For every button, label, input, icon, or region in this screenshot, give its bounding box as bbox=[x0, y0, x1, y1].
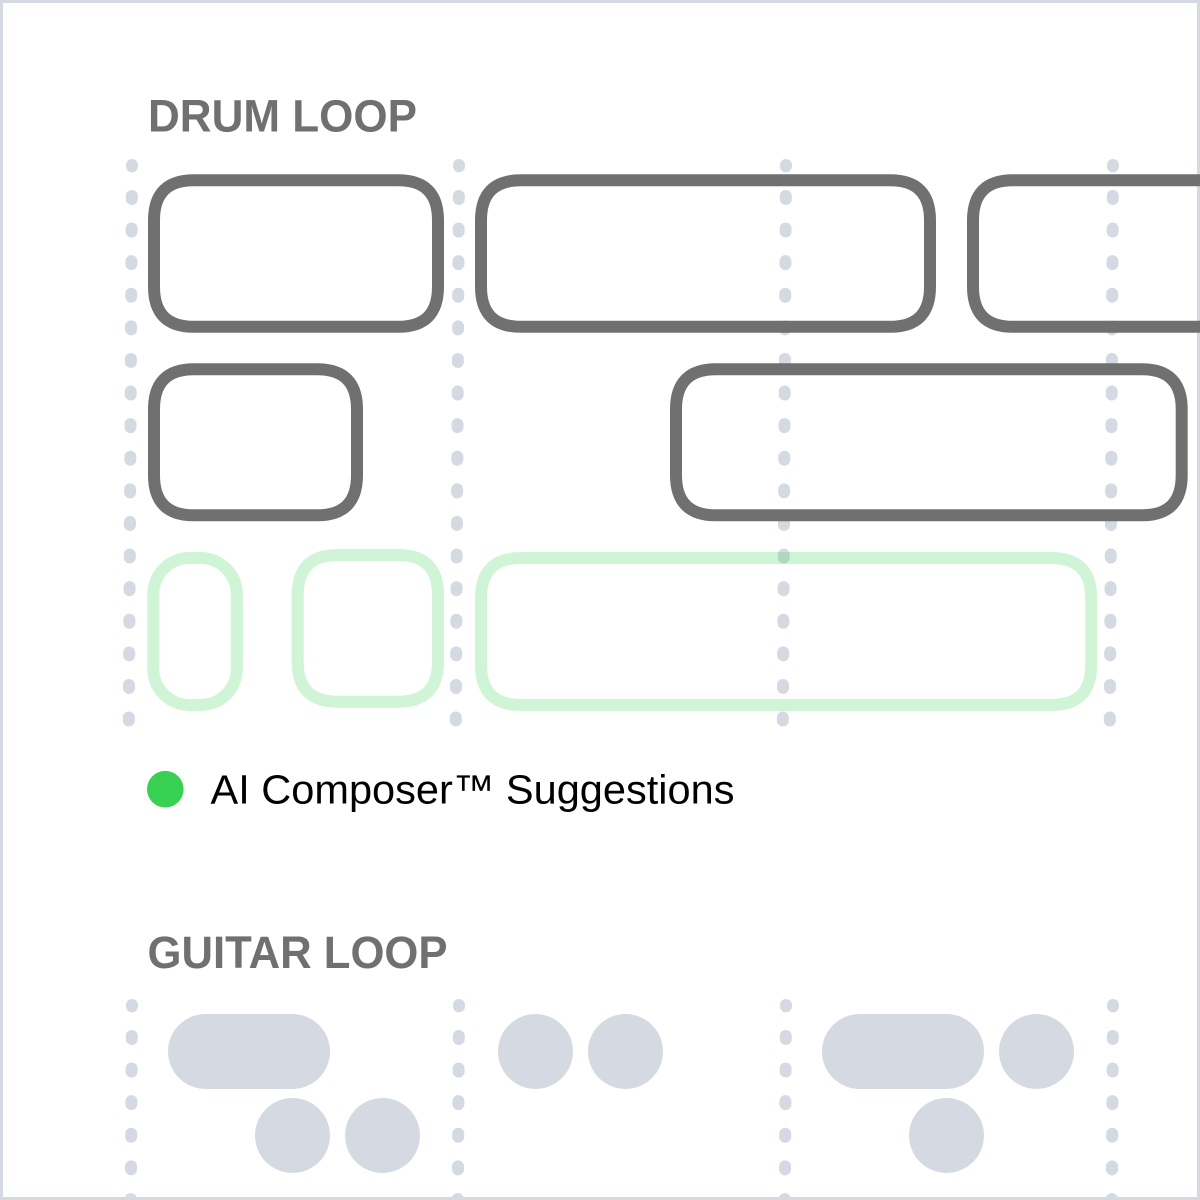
drum loop row 2 bbox=[154, 369, 1182, 515]
drum loop row 1 bbox=[154, 180, 1200, 327]
heading: drum loop: DRUM LOOP bbox=[148, 90, 417, 142]
guitar loop notes bbox=[168, 1014, 1074, 1173]
beat grid: drum loop bbox=[129, 165, 1113, 722]
beat grid: guitar loop bbox=[131, 1005, 1113, 1200]
legend: AI Composer suggestions: AI Composer™ Suggestions bbox=[210, 766, 734, 812]
AI suggestion clips bbox=[153, 555, 1091, 705]
heading: guitar loop: GUITAR LOOP bbox=[148, 927, 448, 978]
